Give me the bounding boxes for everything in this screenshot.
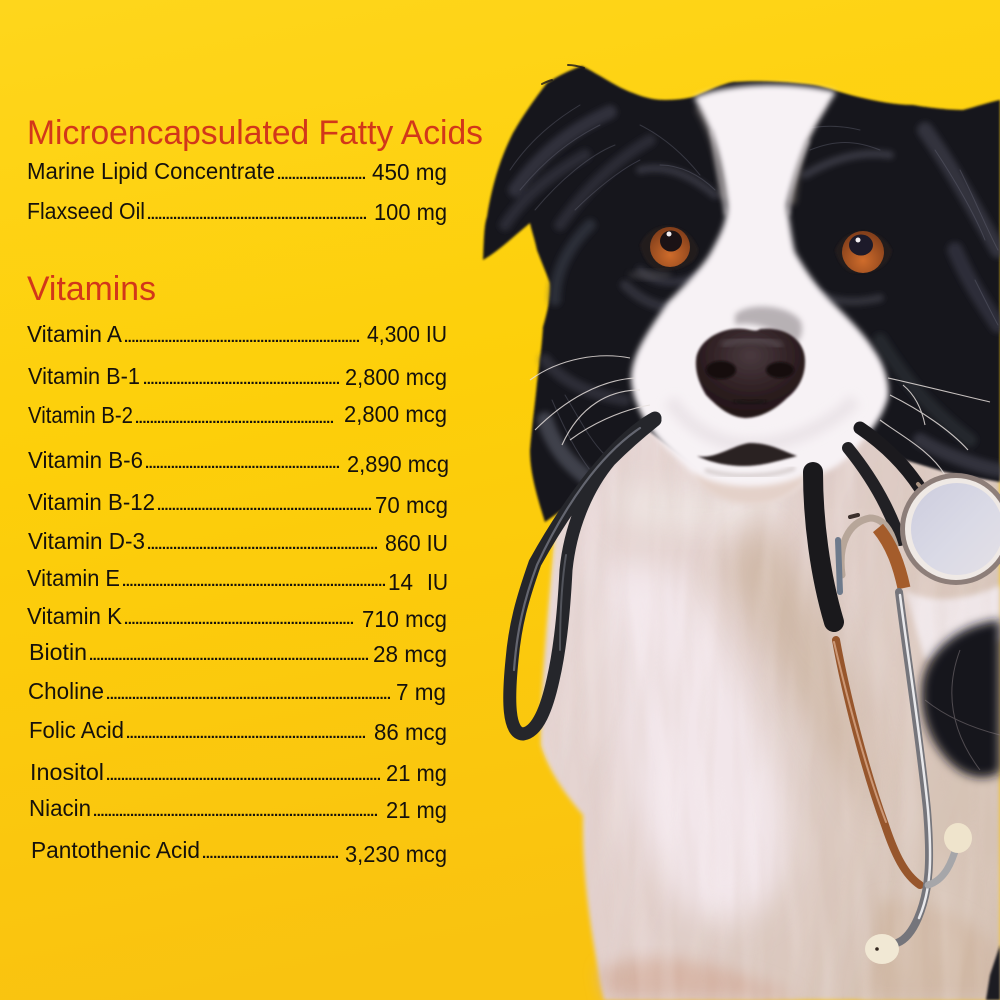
dog lower right black patch — [986, 945, 1000, 1000]
illustration: border collie dog — [483, 65, 1000, 1000]
row: folic acid: ................................................................. — [126, 725, 366, 742]
row: vitamin e — [27, 565, 448, 595]
row: vitamin k: .............................................................. — [124, 611, 354, 628]
row: vitamin b-12: 70 mcg — [375, 492, 448, 518]
row: vitamin b-12 — [28, 489, 448, 518]
row: vitamin b-6: Vitamin B-6 — [28, 447, 143, 473]
row: choline: 7 mg — [396, 679, 446, 705]
dog nose — [696, 329, 805, 418]
row: flaxseed oil: 100 mg — [374, 199, 447, 225]
row: vitamin d-3: 860 IU — [385, 530, 448, 556]
row: flaxseed oil: Flaxseed Oil — [27, 198, 145, 224]
row: vitamin b-1: Vitamin B-1 — [28, 363, 140, 389]
dog left eye — [628, 226, 698, 280]
stethoscope — [510, 418, 957, 943]
row: inositol: Inositol — [30, 759, 104, 785]
stethoscope copper binaural arm — [834, 640, 920, 885]
row: vitamin b-2: 2,800 mcg — [344, 401, 447, 427]
row: flaxseed oil: ........................................................... — [147, 206, 367, 223]
dog head black fur — [483, 65, 1000, 522]
row: pantothenic acid: 3,230 mcg — [345, 841, 447, 867]
row: pantothenic acid — [31, 837, 447, 867]
stethoscope chest piece — [900, 473, 1000, 585]
row: vitamin b-12: .......................................................... — [157, 497, 372, 514]
row: marine lipid concentrate: 450 mg — [372, 159, 447, 185]
row: vitamin d-3: Vitamin D-3 — [28, 528, 145, 554]
row: vitamin b-6: ..................................................... — [145, 455, 340, 472]
row: vitamin b-2 — [28, 401, 447, 428]
row: niacin: 21 mg — [386, 797, 447, 823]
row: marine lipid concentrate — [27, 158, 447, 185]
row: flaxseed oil — [27, 198, 447, 225]
row: choline — [28, 678, 446, 705]
row: niacin: Niacin — [29, 795, 91, 821]
row: vitamin k: Vitamin K — [27, 603, 123, 629]
row: biotin: 28 mcg — [373, 641, 447, 667]
heading: microencapsulated fatty acids: Microencapsulated Fatty Acids — [27, 114, 483, 152]
row: vitamin a — [27, 321, 447, 347]
dog muzzle shading — [670, 307, 855, 505]
stethoscope ear tip lower — [865, 934, 899, 964]
row: vitamin e: 14 — [388, 569, 413, 595]
row: vitamin a: ................................................................ — [124, 329, 360, 346]
stethoscope copper bracket — [838, 515, 904, 592]
row: niacin — [29, 795, 447, 823]
heading: vitamins: Vitamins — [27, 270, 156, 308]
row: choline: Choline — [28, 678, 104, 704]
stethoscope silver binaural arm — [897, 592, 957, 943]
row: biotin: ............................................................................ — [89, 647, 369, 664]
row: folic acid: 86 mcg — [374, 719, 447, 745]
row: vitamin b-12: Vitamin B-12 — [28, 489, 155, 515]
row: inositol: 21 mg — [386, 760, 447, 786]
dog black chest patch — [922, 620, 1000, 777]
row: vitamin e: IU — [427, 569, 448, 595]
row: vitamin d-3 — [28, 528, 448, 556]
row: vitamin b-6 — [28, 447, 449, 477]
row: vitamin b-6: 2,890 mcg — [347, 451, 449, 477]
row: vitamin b-1: 2,800 mcg — [345, 364, 447, 390]
dog right eye — [835, 231, 892, 273]
row: vitamin a: 4,300 IU — [367, 321, 447, 347]
row: vitamin b-2: Vitamin B-2 — [28, 402, 133, 428]
row: biotin: Biotin — [29, 639, 87, 665]
row: vitamin b-1 — [28, 363, 447, 390]
stethoscope tube loop in mouth — [510, 418, 655, 734]
row: choline: ............................................................................. — [106, 686, 391, 703]
row: vitamin b-2: ...................................................... — [135, 410, 334, 427]
row: inositol: .......................................................................... — [106, 767, 381, 784]
row: marine lipid concentrate: ........................ — [277, 166, 366, 183]
row: vitamin k — [27, 603, 447, 632]
row: vitamin k: 710 mcg — [362, 606, 447, 632]
dog whiskers — [530, 356, 990, 490]
row: vitamin d-3: .............................................................. — [147, 536, 378, 553]
row: folic acid: Folic Acid — [29, 717, 124, 743]
row: vitamin a: Vitamin A — [27, 321, 123, 347]
row: folic acid — [29, 717, 447, 745]
row: vitamin e: ....................................................................... — [122, 573, 386, 590]
row: inositol — [30, 759, 447, 786]
row: vitamin b-1: ..................................................... — [143, 371, 340, 388]
stethoscope ear tip upper — [944, 823, 972, 853]
row: biotin — [29, 639, 447, 667]
row: vitamin e: Vitamin E — [27, 565, 120, 591]
row: pantothenic acid: Pantothenic Acid — [31, 837, 200, 863]
dog fur highlights on head — [505, 105, 998, 480]
dog mouth — [697, 443, 797, 476]
row: marine lipid concentrate: Marine Lipid Concentrate — [27, 158, 275, 184]
row: pantothenic acid: ..................................... — [202, 845, 339, 862]
row: niacin: ............................................................................. — [93, 803, 378, 820]
dog white blaze and muzzle — [631, 85, 888, 502]
stethoscope upper right tubes — [848, 428, 930, 540]
dog chest and body fur — [540, 400, 1000, 1000]
stethoscope thick black tube — [813, 472, 834, 622]
